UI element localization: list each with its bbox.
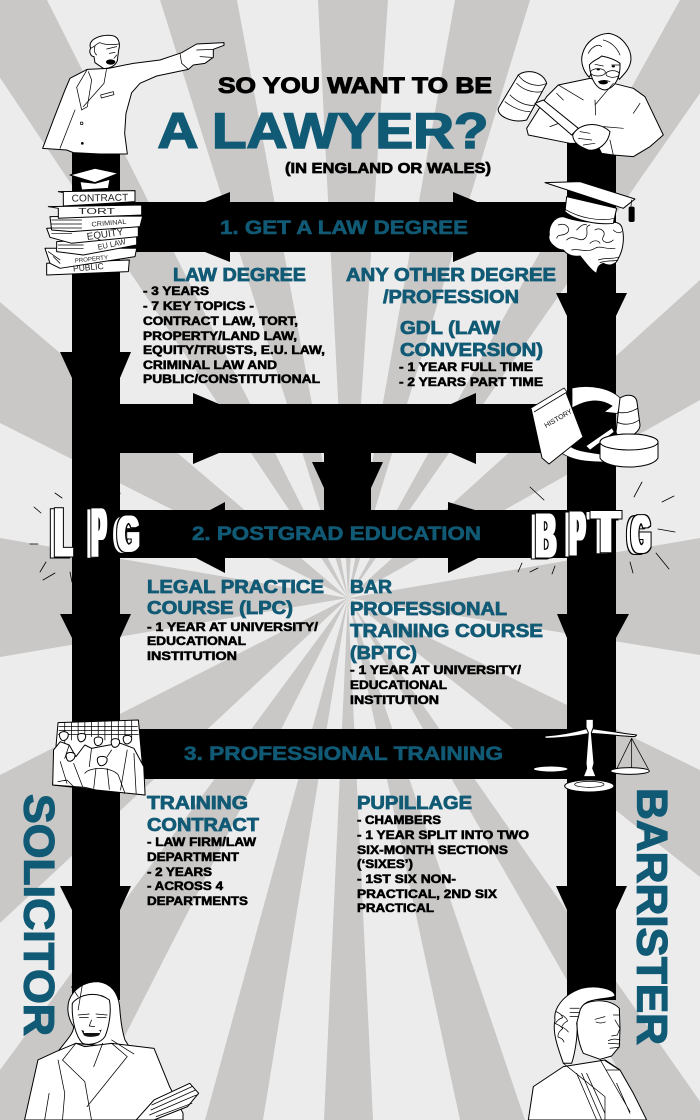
text block: training contract: CONTRACT: [147, 814, 260, 835]
text block: BPTC: INSTITUTION: [350, 693, 439, 707]
icon: history book turning into gavel: HISTORY: [544, 408, 574, 430]
flowchart: black arrows: [60, 140, 629, 1000]
text block: GDL: [399, 317, 543, 389]
text block: pupillage: PUPILLAGE: [357, 792, 472, 813]
text block: law degree: CRIMINAL LAW AND: [143, 358, 277, 372]
text block: law degree: [143, 264, 325, 386]
text block: law degree: - 7 KEY TOPICS -: [143, 299, 254, 313]
text block: BPTC: TRAINING COURSE: [350, 620, 543, 641]
text block: pupillage: - 1 YEAR SPLIT INTO TWO: [357, 828, 529, 842]
icon: stack of law books: [45, 168, 143, 275]
icon: pointing man: [43, 35, 224, 154]
BPTC letters: B: [536, 502, 556, 571]
text block: LPC: - 1 YEAR AT UNIVERSITY/: [147, 620, 319, 634]
icon: stack of law books: EU LAW: [97, 237, 127, 252]
LPC letters: P: [92, 494, 106, 571]
icon: stack of law books: CONTRACT: [72, 193, 128, 205]
text block: training contract: DEPARTMENT: [147, 850, 240, 864]
bar: step 3: [105, 729, 580, 779]
icon: brain with mortarboard: [545, 182, 635, 273]
title line two: A LAWYER?: [158, 102, 488, 159]
BPTC letters: P: [570, 500, 585, 569]
text block: training contract: TRAINING: [147, 792, 248, 813]
text block: LPC: LEGAL PRACTICE: [147, 576, 324, 597]
icon: judge with gavel: [498, 33, 663, 157]
icon: LPC block letters: [30, 493, 139, 582]
title line one: SO YOU WANT TO BE: [218, 73, 492, 98]
LPC letters: L: [55, 494, 72, 571]
text block: any other degree: /PROFESSION: [383, 286, 519, 307]
text block: pupillage: [357, 792, 529, 915]
icon: stack of law books: CRIMINAL: [91, 219, 127, 229]
text block: GDL: - 2 YEARS PART TIME: [399, 375, 543, 389]
icon: stack of law books: EQUITY: [86, 227, 124, 243]
bar: merge after degree: [72, 393, 567, 464]
heading: step 1: 1. GET A LAW DEGREE: [220, 217, 468, 239]
text block: law degree: PUBLIC/CONSTITUTIONAL: [143, 372, 320, 386]
text block: pupillage: SIX-MONTH SECTIONS: [357, 843, 508, 857]
text block: GDL: CONVERSION): [400, 339, 543, 360]
icon: history book turning into gavel: [531, 386, 658, 467]
heading: step 3: 3. PROFESSIONAL TRAINING: [184, 743, 503, 765]
icon: barrister in wig: [528, 987, 647, 1120]
vertical label: solicitor: SOLICITOR: [14, 794, 62, 1036]
text block: GDL: - 1 YEAR FULL TIME: [399, 360, 533, 374]
text block: training contract: DEPARTMENTS: [147, 894, 248, 908]
text block: training contract: [147, 792, 260, 908]
centre stem arrow: [312, 453, 383, 510]
text block: LPC: COURSE (LPC): [147, 597, 293, 618]
left solicitor track: [60, 150, 131, 1000]
icon: group of lawyers photo: [53, 720, 145, 795]
subtitle: (IN ENGLAND OR WALES): [285, 160, 491, 177]
icon: stack of law books: TORT: [78, 206, 116, 216]
text block: pupillage: PRACTICAL, 2ND SIX: [357, 887, 497, 901]
text block: law degree: - 3 YEARS: [143, 284, 209, 298]
text block: training contract: - ACROSS 4: [147, 879, 223, 893]
text block: BPTC: - 1 YEAR AT UNIVERSITY/: [350, 663, 522, 677]
right barrister track: [556, 140, 627, 1000]
text block: law degree: EQUITY/TRUSTS, E.U. LAW,: [143, 343, 325, 357]
text block: pupillage: - 1ST SIX NON-: [357, 872, 456, 886]
icon: scales of justice: [533, 719, 649, 792]
text block: any other degree: [346, 264, 556, 307]
LPC letters: G: [118, 506, 139, 562]
text block: pupillage: PRACTICAL: [357, 901, 434, 915]
BPTC letters: [536, 500, 650, 571]
text block: law degree: CONTRACT LAW, TORT,: [143, 314, 298, 328]
text block: BPTC: [350, 576, 543, 707]
arrowhead pairs on the lower tracks: [60, 614, 629, 910]
text block: any other degree: ANY OTHER DEGREE: [346, 264, 556, 285]
text block: LPC: EDUCATIONAL: [147, 634, 246, 648]
icon: stack of law books: PUBLIC: [73, 261, 104, 274]
title: [158, 73, 492, 177]
LPC letters: [55, 494, 139, 571]
text block: law degree: PROPERTY/LAND LAW,: [143, 329, 297, 343]
BPTC letters: T: [592, 500, 620, 565]
text block: training contract: - LAW FIRM/LAW: [147, 835, 257, 849]
vertical label: barrister: BARRISTER: [628, 788, 676, 1045]
text block: pupillage: - CHAMBERS: [357, 813, 441, 827]
text block: law degree: LAW DEGREE: [173, 264, 306, 285]
text block: LPC: [147, 576, 324, 663]
icon: BPTC block letters: G: [632, 506, 650, 564]
text block: GDL: GDL (LAW: [400, 317, 501, 338]
text block: BPTC: BAR: [350, 576, 392, 597]
text block: training contract: - 2 YEARS: [147, 865, 212, 879]
text block: BPTC: PROFESSIONAL: [350, 598, 507, 619]
icon: BPTC block letters: [518, 479, 675, 574]
icon: solicitor woman: [25, 982, 199, 1120]
text block: LPC: INSTITUTION: [147, 649, 237, 663]
icon: stack of law books: PROPERTY: [75, 255, 108, 265]
text block: pupillage: (‘SIXES’): [357, 857, 413, 871]
text block: BPTC: (BPTC): [350, 642, 417, 663]
bar: step 1: [120, 192, 567, 262]
heading: step 2: 2. POSTGRAD EDUCATION: [192, 523, 481, 545]
bar: step 2: [72, 502, 616, 573]
text block: BPTC: EDUCATIONAL: [350, 678, 447, 692]
